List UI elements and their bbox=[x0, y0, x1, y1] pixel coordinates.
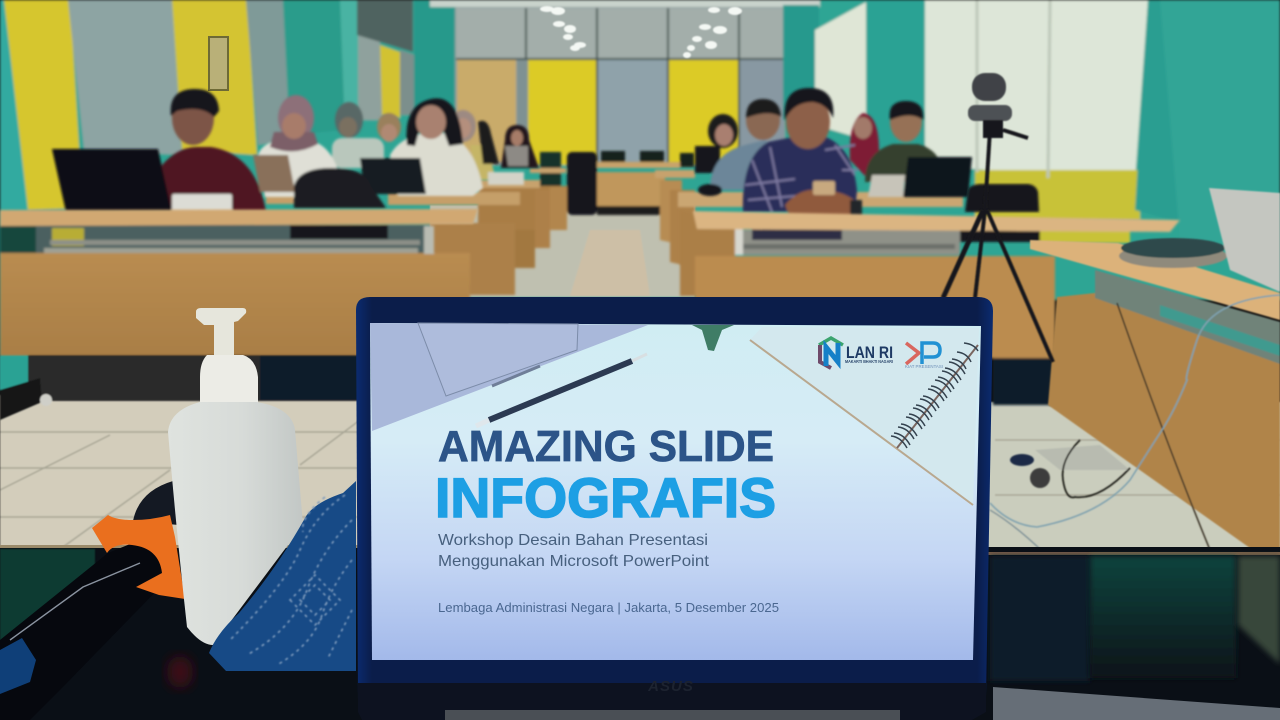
slide: pencil bbox=[476, 354, 647, 426]
bottle neck bbox=[200, 355, 258, 405]
screen slide bbox=[370, 323, 981, 660]
ASUS logo: ASUS bbox=[647, 678, 694, 695]
slide title: AMAZING SLIDE: AMAZING SLIDE bbox=[438, 422, 774, 471]
slide: LAN RI logo: MAKARTI BHAKTI NAGARI bbox=[845, 359, 893, 364]
laptop: black front left bbox=[52, 149, 172, 212]
slide: laptop image bbox=[370, 323, 648, 431]
pump head bbox=[196, 308, 246, 355]
slide: KP logo: KIAT PRESENTASI bbox=[905, 364, 943, 369]
black bag on right table bbox=[698, 184, 722, 196]
floor bbox=[0, 205, 1280, 553]
laptop bezel bbox=[356, 297, 993, 700]
front left desk bbox=[0, 209, 478, 356]
hand sanitizer bottle bbox=[168, 308, 303, 645]
slide: notebook bbox=[750, 327, 979, 505]
rolling stand foot bbox=[1010, 445, 1130, 488]
slide title: INFOGRAFIS: INFOGRAFIS bbox=[435, 466, 776, 529]
attendee white shirt bbox=[390, 98, 483, 196]
foreground dark table surface bbox=[0, 545, 1280, 720]
attendee red hijab bbox=[850, 113, 879, 176]
white boxes, rear tables bbox=[488, 172, 524, 185]
ceiling lights bbox=[540, 6, 742, 58]
attendees: right row bbox=[695, 88, 972, 218]
laptop: black right bbox=[903, 157, 972, 197]
attendee mauve hijab bbox=[258, 95, 340, 197]
laptop: tan, back bbox=[253, 155, 295, 192]
under-desk dark area, left bbox=[0, 356, 358, 420]
black chair behind tripod bbox=[965, 184, 1039, 212]
tripod with webcam bbox=[943, 73, 1053, 362]
silver laptop bbox=[1209, 188, 1280, 292]
white box bbox=[172, 194, 232, 216]
slide: KP logo bbox=[905, 343, 943, 369]
attendee far left back row bbox=[501, 125, 539, 168]
slide subtitle line 2: Menggunakan Microsoft PowerPoint bbox=[438, 553, 710, 570]
laptop: silver right bbox=[868, 175, 905, 197]
wall picture frame bbox=[209, 37, 228, 90]
slide: plant bbox=[692, 325, 734, 351]
blue batik cloth bbox=[209, 481, 356, 671]
attendee hijab yellow bbox=[450, 110, 499, 180]
attendees: left row bbox=[52, 89, 539, 216]
slide footer: Lembaga Administrasi Negara | Jakarta, 5 Desember 2025 bbox=[438, 600, 779, 615]
slide subtitle line 1: Workshop Desain Bahan Presentasi bbox=[438, 532, 708, 549]
front right desk bbox=[680, 210, 1180, 405]
black cylinder with orange clamp bbox=[0, 515, 185, 720]
attendee plaid shirt bbox=[743, 88, 862, 218]
laptop: black, centre left bbox=[360, 158, 426, 194]
rear chairs and desks: left and right rows bbox=[266, 151, 963, 295]
slide: LAN RI logo: LAN RI bbox=[846, 343, 893, 362]
laptop in foreground bbox=[356, 297, 993, 720]
laptop base bbox=[358, 683, 986, 720]
room walls and ceiling bbox=[0, 0, 1280, 390]
attendee far woman bbox=[695, 114, 738, 173]
cables bbox=[990, 295, 1280, 552]
speakerphone bbox=[1119, 238, 1227, 268]
attendee maroon shirt bbox=[160, 89, 266, 212]
slide: LAN RI logo bbox=[819, 338, 893, 368]
attendee green shirt bbox=[865, 101, 943, 182]
dark bag behind bottle bbox=[133, 481, 179, 525]
hinge strip bbox=[445, 710, 900, 720]
bottle body bbox=[168, 402, 303, 645]
attendee grey shirt bbox=[710, 99, 783, 190]
backpack bbox=[294, 168, 386, 208]
side table with equipment, right bbox=[990, 188, 1280, 555]
laptop: grey, far back bbox=[505, 146, 528, 166]
attendee grey hijab bbox=[332, 102, 401, 168]
